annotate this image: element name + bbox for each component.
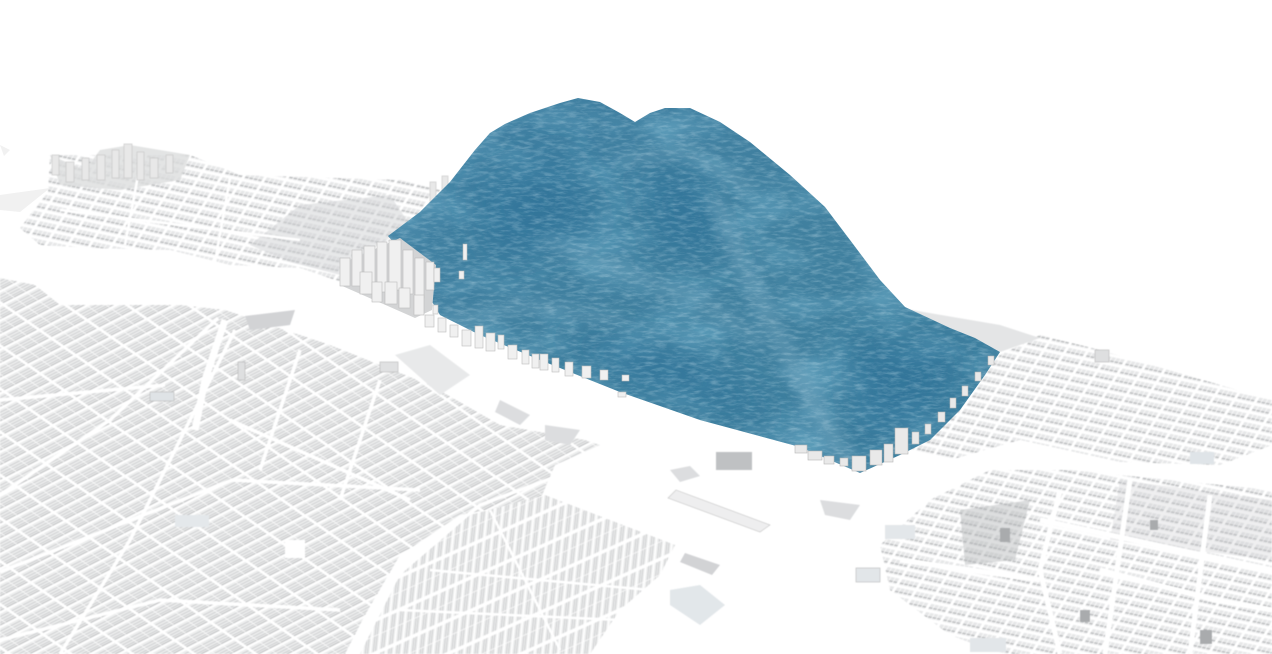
city: lower right district (856, 470, 1272, 654)
buildings at the mountain's left edge (340, 238, 629, 397)
city: right district (900, 308, 1272, 465)
city: upper left district (20, 144, 448, 285)
city: lower left district (0, 278, 600, 654)
pale distant edge, left (0, 145, 50, 212)
city: lower middle district (360, 400, 860, 654)
mountain of blue particles (380, 90, 1010, 480)
buildings at the mountain's lower edge (795, 356, 994, 471)
shading: dark facets (470, 150, 960, 440)
shading: light ridges (450, 150, 850, 465)
